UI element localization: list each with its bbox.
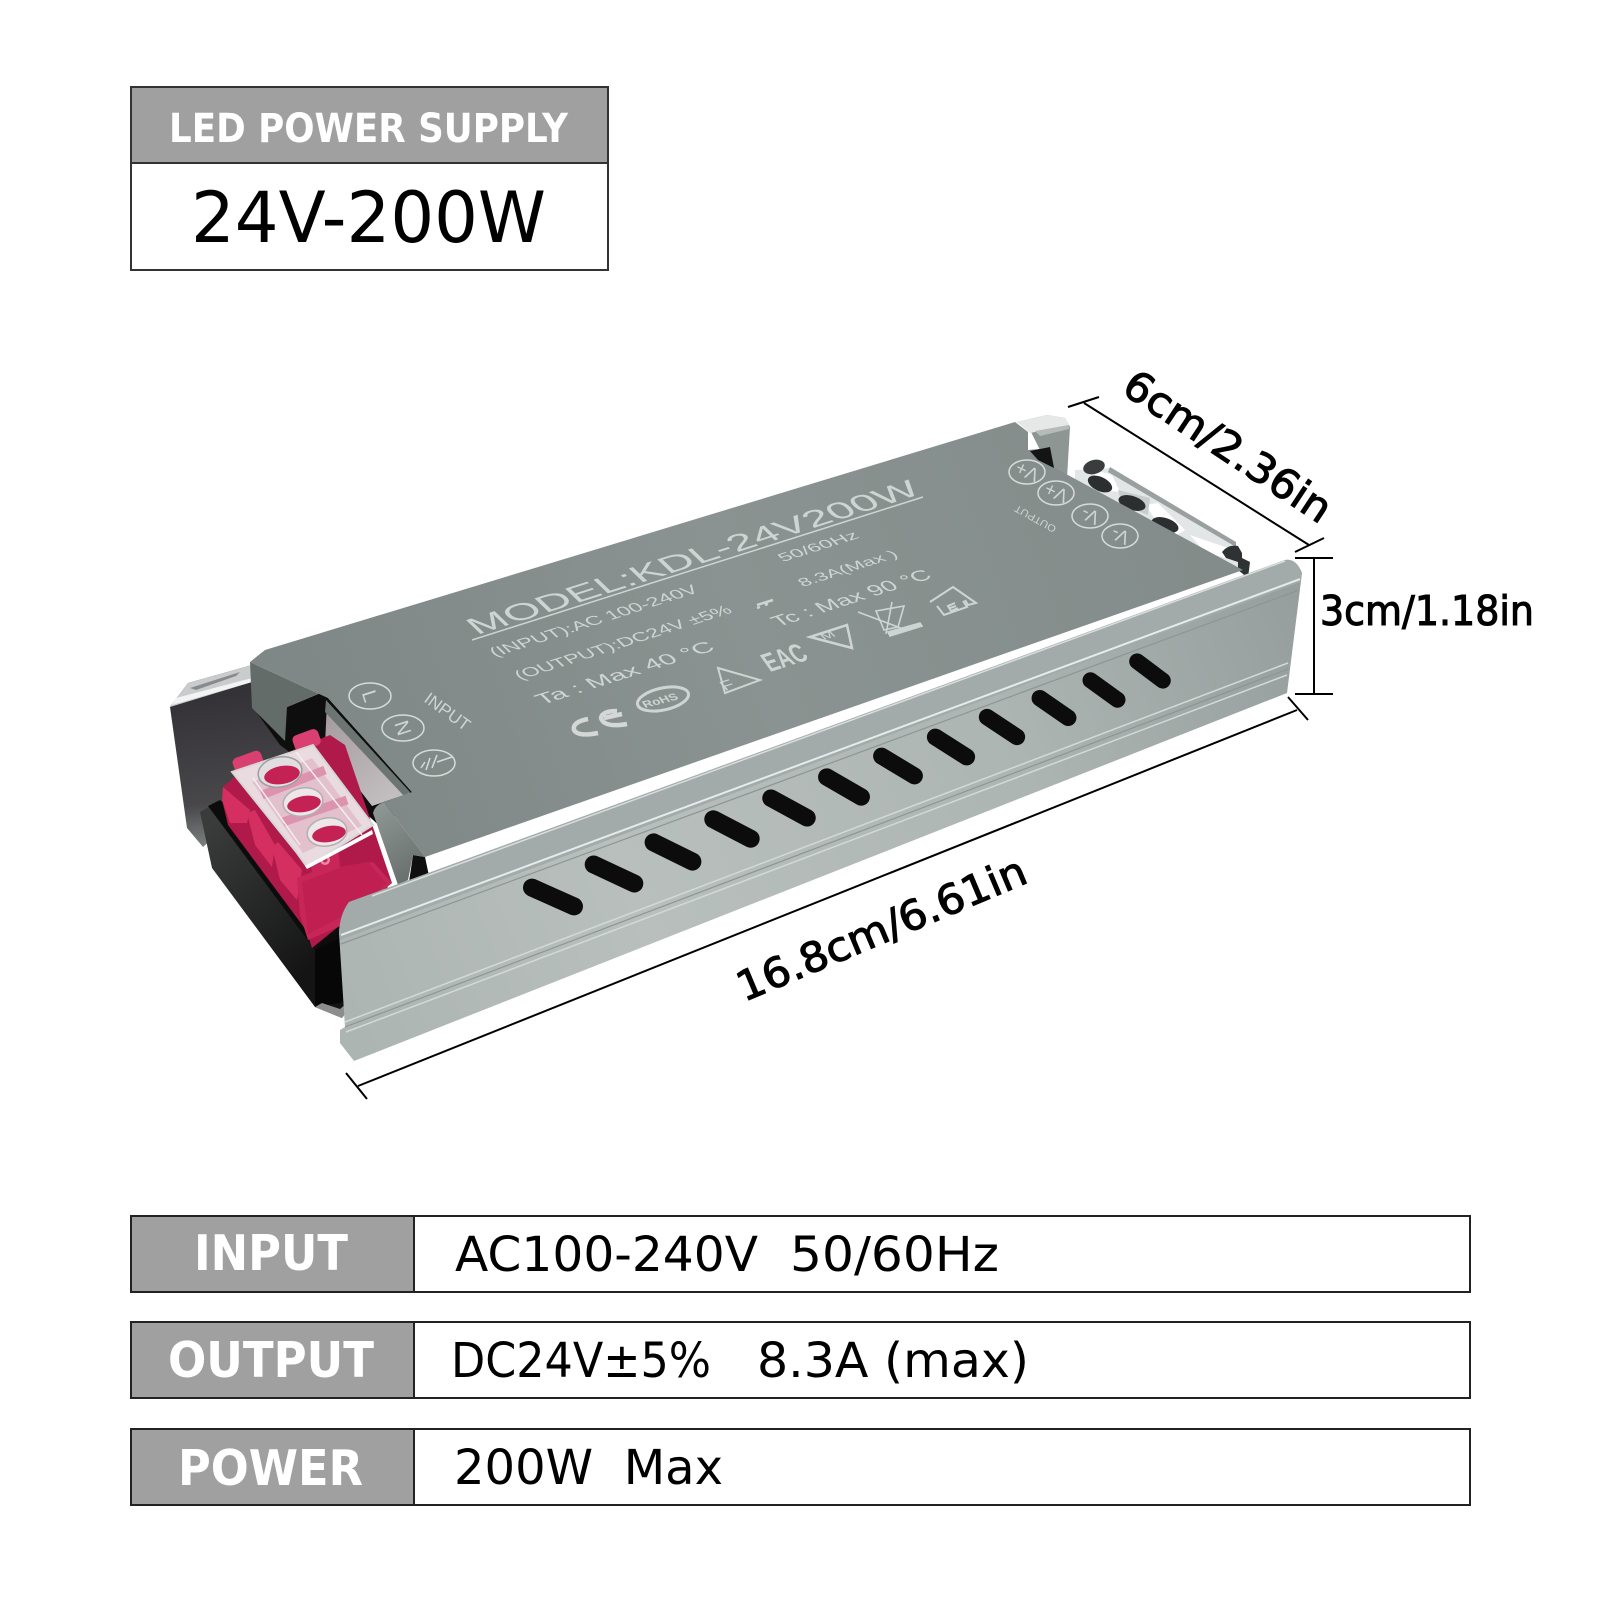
front left fold of top plate [373, 802, 429, 885]
rating plate: specification lines: Ta : Max 40 °C [529, 638, 719, 708]
dimension: depth 6cm: 6cm/2.36in [1114, 360, 1341, 533]
icon: EAC: EAC [755, 638, 814, 677]
spec row: input: AC100-240V [455, 1227, 758, 1283]
rear right silver tab [1017, 415, 1070, 478]
output terminal labels [1009, 456, 1138, 548]
right output terminal strip [1075, 457, 1250, 578]
icon: F triangle [716, 668, 760, 694]
spec row: output [131, 1322, 1470, 1398]
spec row: input: INPUT [194, 1225, 349, 1282]
INPUT label: INPUT [421, 689, 474, 735]
spec row: output: OUTPUT [168, 1332, 375, 1389]
spec row: input [131, 1216, 1470, 1292]
rating plate: model line: MODEL:KDL-24V200W [459, 475, 928, 640]
white highlight along cover edge [425, 567, 1240, 872]
rear left bracket [170, 665, 300, 847]
dimension: length 16.8cm [346, 697, 1308, 1099]
spec row: output: 8.3A (max) [757, 1333, 1029, 1389]
spec row: output: DC24V±5% [451, 1333, 711, 1389]
icon: M triangle: M [816, 629, 838, 642]
output terminal labels: V+ [1012, 456, 1043, 485]
rating plate: specification lines: Tc : Max 90 °C [765, 566, 936, 630]
output terminal labels: V- [1078, 501, 1103, 528]
icon: indoor house [930, 587, 976, 615]
rating plate: specification lines: (INPUT):AC 100-240V [485, 583, 703, 660]
black rear notch [1030, 447, 1054, 468]
icon: F triangle: F [716, 677, 739, 694]
black notch and inner wall [252, 692, 412, 830]
icon: RoHS: RoHS [639, 691, 681, 710]
icon: M triangle [810, 625, 852, 648]
OUTPUT label: OUTPUT [1013, 502, 1058, 534]
heading: product type: LED POWER SUPPLY [169, 106, 569, 152]
icon: RoHS [635, 683, 691, 715]
pink terminal block [222, 728, 392, 948]
ventilation slots [532, 661, 1163, 906]
rating plate: specification lines: 8.3A(Max ) [793, 547, 902, 589]
rating plate: specification lines: 50/60Hz [773, 528, 863, 564]
dimension: height 3cm: 3cm/1.18in [1320, 587, 1534, 635]
input terminal labels [349, 683, 455, 776]
front heat-sink face [339, 560, 1302, 1061]
top plate [250, 422, 1243, 857]
dimension: length 16.8cm: 16.8cm/6.61in [729, 847, 1034, 1011]
product photo: power supply unit [170, 415, 1302, 1061]
rating plate: specification lines: (OUTPUT):DC24V ±5% [510, 603, 736, 683]
output terminal labels: V- [1108, 521, 1133, 548]
title box: LED power supply 24V-200W [131, 87, 608, 270]
input terminal labels: N [389, 718, 415, 739]
input terminal labels: L [357, 688, 381, 705]
heading: model rating: 24V-200W [191, 177, 546, 259]
left rear fold of top plate [250, 662, 328, 741]
output terminal labels: V+ [1041, 477, 1072, 506]
spec row: power [131, 1429, 1470, 1505]
black terminal base [200, 800, 400, 1018]
dimension: height 3cm [1295, 558, 1534, 694]
spec row: input: 50/60Hz [790, 1227, 999, 1283]
rating plate: specification lines [485, 528, 936, 708]
clear terminal cover [232, 745, 373, 869]
spec row: power: 200W Max [454, 1440, 723, 1496]
icon: CE mark [574, 711, 627, 734]
spec row: power: POWER [178, 1440, 363, 1497]
icon: crossed-out bin [858, 602, 922, 636]
